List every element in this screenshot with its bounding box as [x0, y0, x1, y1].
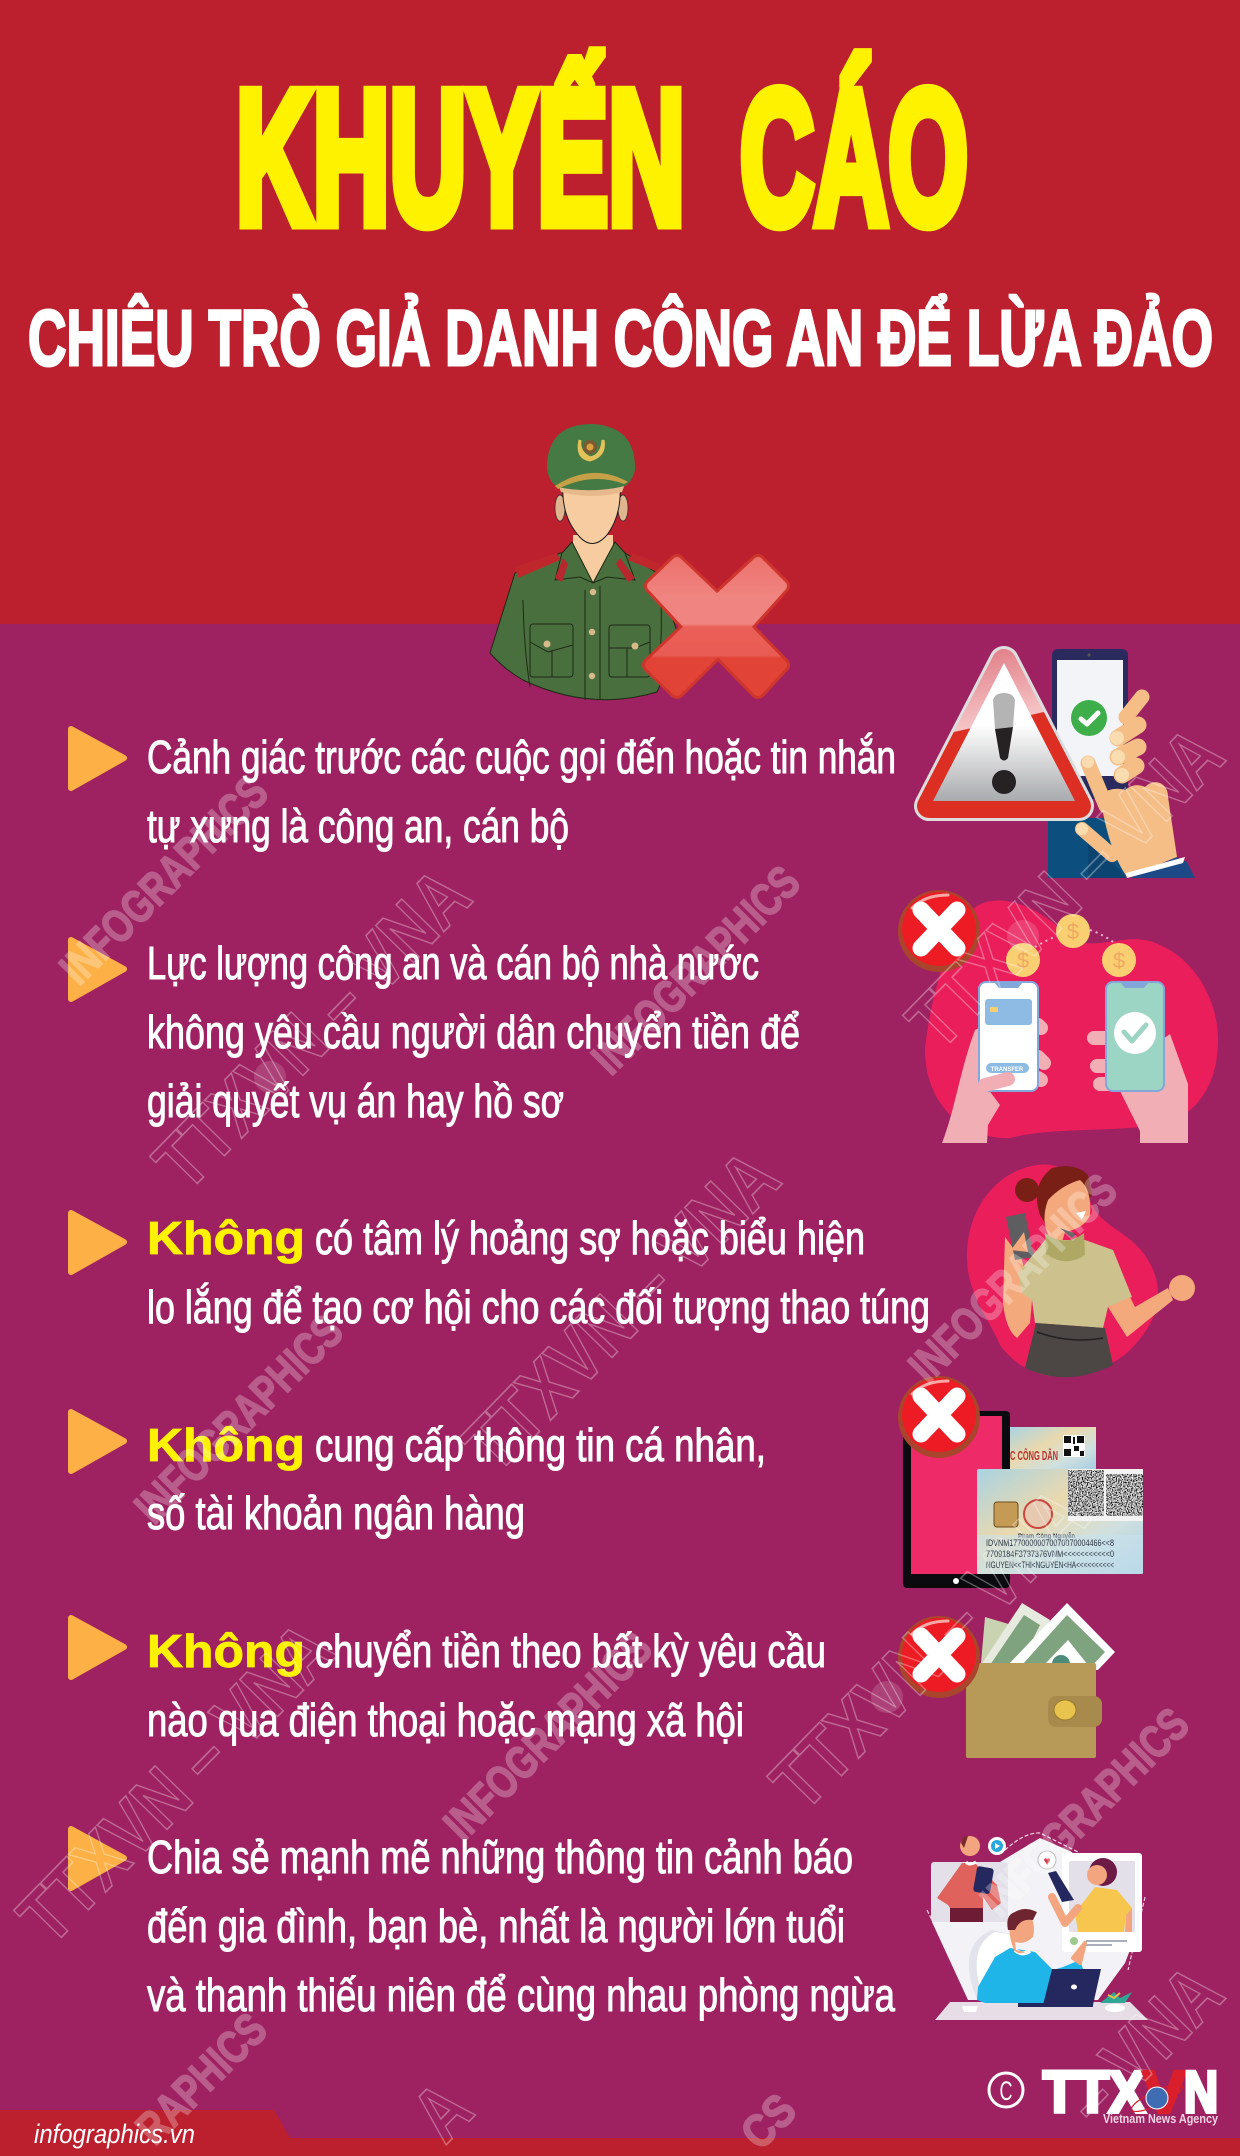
illustration: money transfer between phones: TRANSFER [991, 1067, 1024, 1073]
panel: purple content background [0, 624, 1240, 2156]
watermarks: INFOGRAPHICS and TTXVN – VNA: INFOGRAPHICS [124, 1305, 353, 1533]
item text: lo lắng để tạo cơ hội cho các đối tượng thao túng [147, 1281, 930, 1333]
watermarks: INFOGRAPHICS and TTXVN – VNA: TTXVN – VNA [755, 1472, 1104, 1826]
watermarks: INFOGRAPHICS and TTXVN – VNA: INFOGRAPHICS [49, 766, 278, 994]
bullet arrow [71, 1829, 124, 1888]
illustration: family sharing information online [927, 1833, 1148, 2020]
footer website label: infographics.vn [34, 2119, 195, 2149]
title: KHUYẾN CÁO: CÁO [740, 52, 968, 264]
illustration: wallet with money [966, 1603, 1115, 1758]
list item 6 [71, 1829, 895, 2021]
illustration: family sharing information online: ♥ [1043, 1854, 1051, 1868]
list item 3 [71, 1212, 930, 1333]
icon: red X badge 4 [898, 1376, 980, 1458]
item text: chuyển tiền theo bất kỳ yêu cầu [315, 1625, 826, 1677]
logo: copyright TTXVN: V [1143, 2060, 1185, 2125]
item text: tự xưng là công an, cán bộ [147, 800, 569, 852]
title: KHUYẾN CÁO: KHUYẾN [236, 52, 685, 264]
item text: có tâm lý hoảng sợ hoặc biểu hiện [315, 1212, 865, 1264]
item text: Không [147, 1419, 305, 1471]
item text [147, 937, 800, 1127]
watermarks: INFOGRAPHICS and TTXVN – VNA: TTXVN – VNA [2, 1606, 351, 1960]
item text: Không [147, 1212, 305, 1264]
illustration: tablet and citizen ID: C CÔNG DÂN [1010, 1448, 1058, 1463]
watermarks: INFOGRAPHICS and TTXVN – VNA: INFOGRAPHICS [581, 856, 810, 1084]
illustration: tablet and citizen ID: Phạm Công Nguyễn [1018, 1533, 1075, 1540]
icon: red X badge 2 [898, 890, 980, 972]
logo: copyright TTXVN [989, 2060, 1219, 2126]
watermarks: INFOGRAPHICS and TTXVN – VNA: A [396, 2066, 489, 2156]
item text: nào qua điện thoại hoặc mạng xã hội [147, 1694, 744, 1746]
illustration: money transfer between phones: $ [1017, 948, 1029, 973]
watermarks: INFOGRAPHICS and TTXVN – VNA [2, 711, 1240, 2156]
item text: Cảnh giác trước các cuộc gọi đến hoặc tin nhắn [147, 731, 896, 783]
logo: copyright TTXVN: TTX [1043, 2060, 1145, 2125]
item text: cung cấp thông tin cá nhân, [315, 1419, 766, 1471]
watermarks: INFOGRAPHICS and TTXVN – VNA: RAPHICS [125, 2003, 277, 2154]
bullet arrow [71, 1618, 124, 1677]
illustration: money transfer between phones: $ [1113, 948, 1125, 973]
watermarks: INFOGRAPHICS and TTXVN – VNA: TTXVN – VNA [447, 1134, 796, 1488]
item text [147, 1419, 766, 1539]
item text [147, 731, 896, 852]
item text: không yêu cầu người dân chuyển tiền để [147, 1006, 800, 1058]
list item 1 [71, 729, 896, 852]
illustration: money transfer between phones: $ [1067, 919, 1079, 944]
illustration: anxious woman on phone [967, 1164, 1195, 1377]
logo: copyright TTXVN: C [1000, 2076, 1012, 2106]
item text [147, 1625, 826, 1746]
watermarks: INFOGRAPHICS and TTXVN – VNA: TTXVN – VNA [138, 852, 487, 1206]
item text: Lực lượng công an và cán bộ nhà nước [147, 937, 759, 989]
item text: số tài khoản ngân hàng [147, 1487, 525, 1539]
item text: Chia sẻ mạnh mẽ những thông tin cảnh báo [147, 1831, 853, 1883]
item text: và thanh thiếu niên để cùng nhau phòng ngừa [147, 1969, 895, 2021]
watermarks: INFOGRAPHICS and TTXVN – VNA: INFOGRAPHICS [898, 1164, 1127, 1392]
watermarks: INFOGRAPHICS and TTXVN – VNA: INFOGRAPHICS [433, 1622, 662, 1850]
icon: red X badge 5 [898, 1616, 980, 1698]
list item 4 [71, 1412, 766, 1539]
illustration: tablet and citizen ID: NGUYEN<<THI<NGUYEN<HA<<<<<<<<<< [986, 1560, 1114, 1571]
bullet arrow [71, 1412, 124, 1471]
list item 5 [71, 1618, 826, 1746]
bullet arrow [71, 940, 124, 999]
item text [147, 1831, 895, 2021]
illustration: money transfer between phones [925, 900, 1218, 1143]
list item 2 [71, 937, 800, 1127]
illustration: police officer [490, 424, 680, 700]
bullet arrow [71, 1213, 124, 1272]
illustration: tablet and citizen ID: 7709184F3737376VNM<<<<<<<<<<<0 [986, 1549, 1114, 1560]
item text [147, 1212, 930, 1333]
illustration: warning sign and phone [929, 649, 1195, 878]
item text: Không [147, 1625, 305, 1677]
logo: copyright TTXVN: N [1184, 2060, 1218, 2125]
footer: red strip and tab [0, 2110, 1240, 2156]
item text: giải quyết vụ án hay hồ sơ [147, 1075, 564, 1127]
bullet arrow [71, 729, 124, 788]
illustration: tablet and citizen ID: IDVNM17700000070070070004466<<8 [986, 1538, 1114, 1549]
icon: large red cross [650, 562, 782, 691]
logo: copyright TTXVN: Vietnam News Agency [1103, 2111, 1219, 2126]
illustration: tablet and citizen ID [903, 1411, 1143, 1588]
item text: đến gia đình, bạn bè, nhất là người lớn tuổi [147, 1900, 845, 1952]
panel: red header background [0, 0, 1240, 624]
